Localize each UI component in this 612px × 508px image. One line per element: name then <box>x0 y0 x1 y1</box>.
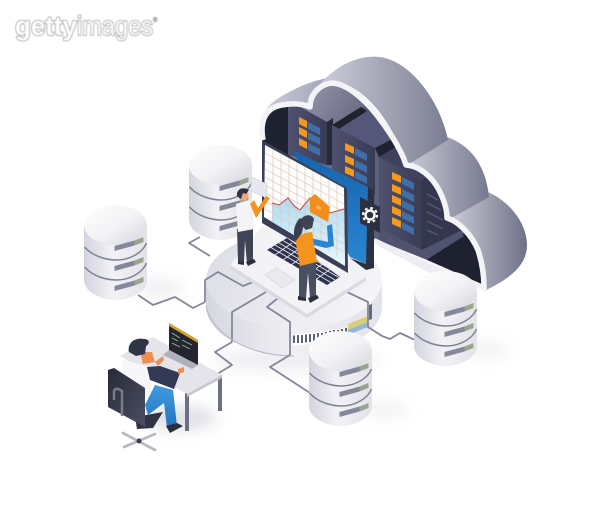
face <box>140 352 155 364</box>
chair seat <box>135 412 163 429</box>
connector lines: front <box>214 342 310 393</box>
laptop base <box>230 225 366 314</box>
disc platform <box>205 232 382 356</box>
disc side port <box>369 304 372 320</box>
cavity: dark left wall <box>263 106 290 156</box>
chart grid <box>265 145 344 260</box>
chair base <box>123 433 155 450</box>
disc vents <box>293 328 347 345</box>
cavity: white floor strip <box>375 238 442 274</box>
desk top <box>120 337 222 394</box>
disc side <box>206 280 382 356</box>
worker at desk <box>108 323 222 450</box>
watermark: gettyimages logo: ® <box>153 17 158 24</box>
screen frame <box>262 140 348 273</box>
cloud with server room <box>258 57 527 292</box>
head <box>301 215 314 230</box>
cloud: white rim <box>262 83 484 288</box>
jeans <box>145 385 177 428</box>
shoe <box>166 423 183 433</box>
laptop <box>163 323 198 369</box>
legs <box>237 226 253 264</box>
legs <box>299 260 316 298</box>
circuit traces on disc <box>205 272 382 356</box>
server 3 <box>375 135 464 262</box>
chart area <box>272 198 345 266</box>
connector lines: back <box>138 237 415 340</box>
disc top <box>206 232 382 328</box>
torso <box>295 232 317 266</box>
keyboard <box>267 238 340 285</box>
desk legs <box>185 375 222 431</box>
shirt <box>236 200 254 232</box>
database: bottom <box>309 331 372 426</box>
hair <box>237 188 249 199</box>
chair armrest <box>114 389 122 416</box>
gear tag <box>360 197 380 233</box>
cloud: top lobe <box>320 57 448 166</box>
cloud: back left lobe <box>262 78 345 135</box>
orange tag on screen <box>310 194 330 222</box>
watermark: gettyimages logo: getty <box>15 11 77 41</box>
cavity back wall <box>262 83 484 288</box>
arm <box>250 196 270 218</box>
shirt <box>123 360 156 402</box>
laptop with chart: % <box>316 206 322 212</box>
screen panel <box>264 145 345 266</box>
watermark: gettyimages logo <box>15 11 158 41</box>
laptop with chart <box>230 140 380 318</box>
chart red line <box>272 198 344 213</box>
ponytail <box>294 218 304 241</box>
touchpad <box>265 268 295 288</box>
paper <box>251 177 267 198</box>
hands <box>155 356 184 374</box>
server 2 <box>332 106 376 195</box>
blue arm <box>310 224 334 248</box>
head <box>238 190 248 200</box>
ground shadows <box>136 279 510 430</box>
server 1 <box>288 100 333 165</box>
chair back <box>108 368 145 427</box>
sleeve <box>147 366 180 389</box>
person: woman with tag <box>294 215 334 303</box>
cloud: second lobe <box>400 137 489 220</box>
servers clipped to cavity <box>263 106 482 284</box>
database: right <box>414 271 477 366</box>
cloud: third lobe <box>440 192 527 291</box>
watermark: gettyimages logo: images <box>77 11 153 41</box>
cavity: dark floor <box>426 234 482 284</box>
person: man with paper <box>236 177 270 266</box>
hair <box>129 339 149 356</box>
database: top <box>189 145 252 240</box>
blue tablet behind screen <box>292 150 373 267</box>
database: left <box>84 205 147 300</box>
